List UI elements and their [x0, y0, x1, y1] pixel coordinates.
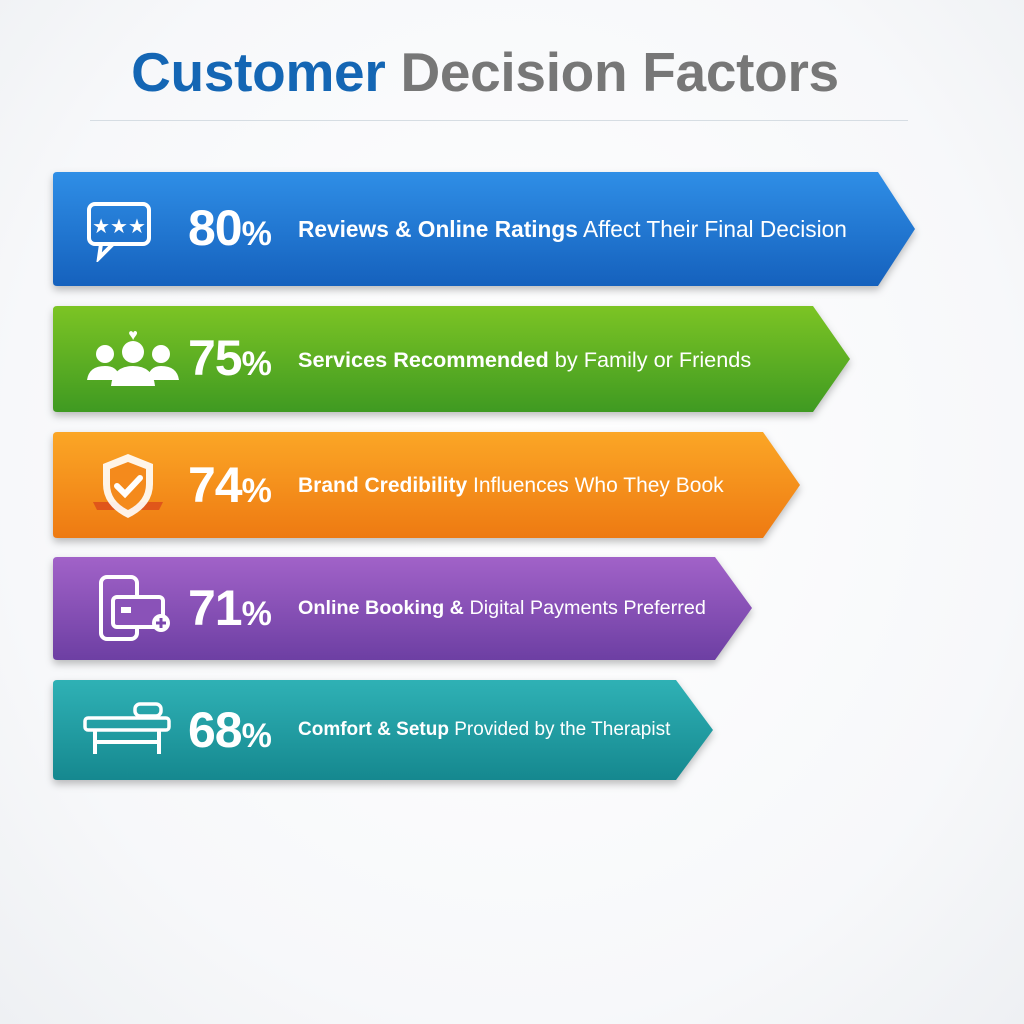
icon: massage table: [83, 702, 171, 754]
label: Reviews & Online Ratings Affect Their Final Decision: [298, 216, 847, 242]
percentage: 80%: [188, 200, 271, 256]
icon: people: ♥: [128, 327, 138, 344]
icon: phone card: [99, 575, 170, 641]
bar: online booking 71%: [48, 556, 754, 668]
label: Services Recommended by Family or Friends: [298, 347, 751, 372]
percentage: 71%: [188, 580, 271, 636]
label: Comfort & Setup Provided by the Therapist: [298, 719, 670, 740]
bar: comfort 68%: [48, 680, 716, 788]
bar: recommended 75%: [48, 306, 852, 420]
label: Online Booking & Digital Payments Preferred: [298, 597, 706, 619]
percentage: 74%: [188, 457, 271, 513]
title: Customer Decision Factors: [131, 41, 839, 103]
icon: speech bubble stars: [87, 202, 151, 262]
label: Brand Credibility Influences Who They Book: [298, 474, 724, 497]
icon: people: [87, 327, 179, 386]
icon: shield check: [93, 454, 163, 518]
percentage: 68%: [188, 702, 271, 758]
bar: credibility 74%: [48, 432, 802, 546]
percentage: 75%: [188, 330, 271, 386]
icon: speech bubble stars: ★★★: [92, 216, 146, 238]
bar: reviews 80%: [48, 172, 918, 294]
